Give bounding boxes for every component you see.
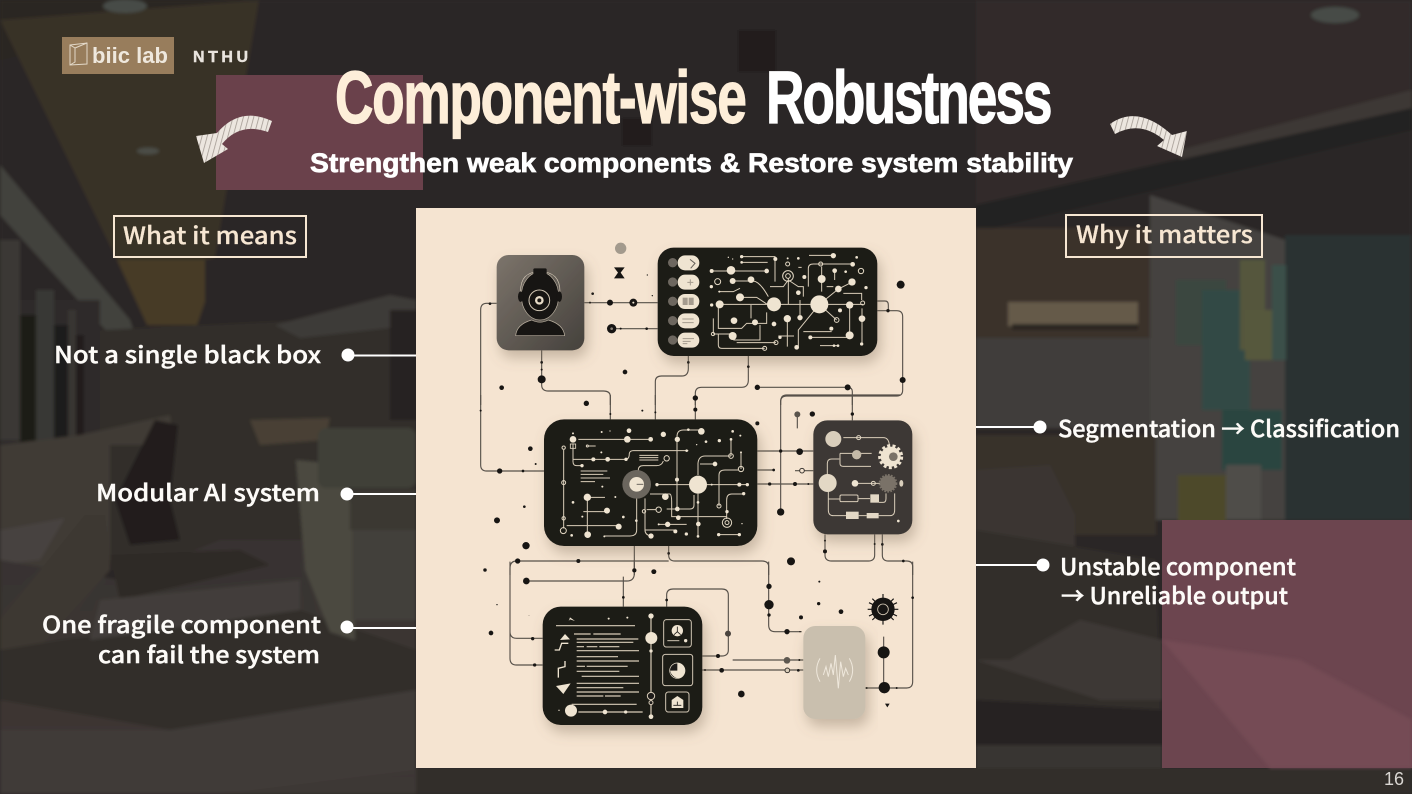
pill buttons	[668, 255, 699, 348]
circuit traces	[712, 255, 863, 348]
icon: pie box	[663, 654, 693, 686]
heading box: What it means: What it means	[123, 216, 297, 251]
label: One fragile component can fail the system	[42, 606, 416, 670]
label: Modular AI system	[96, 474, 416, 508]
title: Component-wise: Component-wise	[335, 56, 747, 139]
icon: dial box	[664, 620, 691, 647]
text lines	[556, 618, 651, 717]
icon: grey node	[615, 243, 626, 254]
label: Not a single black box	[54, 336, 416, 370]
circuit traces	[564, 430, 748, 537]
icon: spiked gear	[868, 594, 898, 625]
icon: grey gear	[880, 475, 896, 492]
label: Segmentation to Classification: Segmentation → Classification	[1058, 410, 1400, 444]
connectors and dots: upper part	[481, 243, 906, 406]
label: Unstable component to Unreliable output: Unstable component	[1060, 548, 1296, 582]
panel: top circuit block	[658, 248, 877, 356]
label: Unstable component to Unreliable output	[976, 548, 1296, 611]
subtitle: Strengthen weak components & Restore system stability	[310, 148, 1073, 178]
page number: 16	[1384, 769, 1404, 789]
label: Modular AI system: Modular AI system	[96, 474, 320, 508]
label: One fragile component can fail the system: One fragile component	[42, 606, 321, 640]
connectors and dots: middle part	[480, 395, 913, 575]
title: Robustness: Robustness	[766, 56, 1053, 139]
tile: user avatar	[497, 255, 584, 350]
logo: NTHU: NTHU	[193, 49, 248, 66]
panel: right gear block	[813, 420, 912, 534]
label: Not a single black box: Not a single black box	[54, 336, 321, 370]
decorative rose panel: top left	[216, 75, 423, 190]
connectors and dots: lower part	[483, 560, 914, 707]
arrow: right curved	[1110, 116, 1187, 157]
heading box: Why it matters: Why it matters	[1076, 215, 1253, 250]
icon: house box	[666, 692, 689, 712]
icon: hourglass	[614, 267, 625, 278]
logo: biic lab: biic lab	[92, 43, 168, 68]
label: Unstable component to Unreliable output: → Unreliable output	[1061, 577, 1288, 611]
title	[335, 56, 1053, 139]
central diagram panel	[416, 208, 976, 768]
logo: biic lab	[62, 37, 174, 74]
panel: bottom text block	[543, 607, 702, 725]
icon: pale gear	[880, 446, 902, 468]
tile: waveform	[803, 626, 865, 719]
panel: middle circuit block	[544, 419, 757, 546]
arrow: left curved	[196, 116, 272, 163]
label: One fragile component can fail the system: can fail the system	[98, 636, 320, 670]
decorative rose panel: bottom right	[1162, 520, 1412, 768]
